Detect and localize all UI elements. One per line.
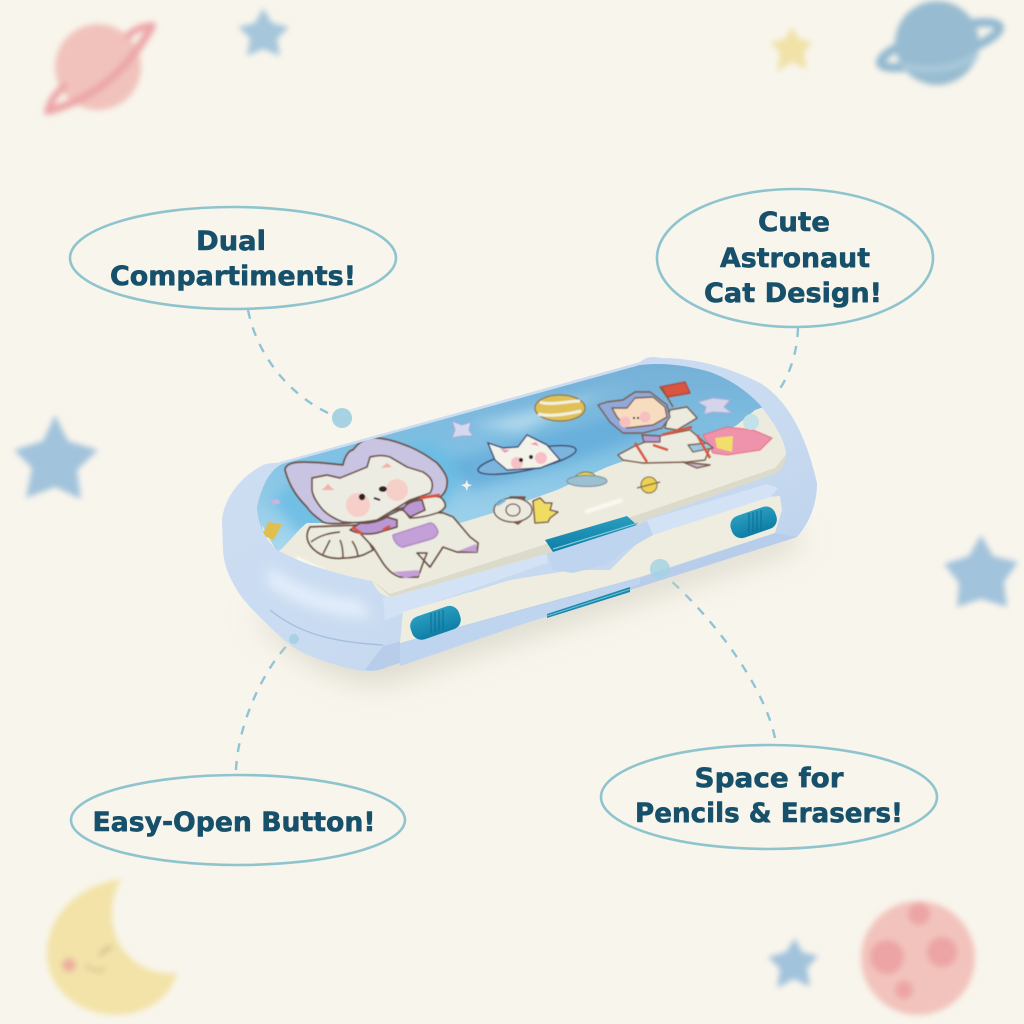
callout connector: dual compartments xyxy=(248,310,352,428)
front cream strip xyxy=(400,496,782,643)
callout: dual compartments: Dual xyxy=(196,226,266,257)
purple vest xyxy=(642,435,660,442)
astronaut bear xyxy=(598,382,713,468)
callout: dual compartments: Compartiments! xyxy=(110,261,356,292)
mini rocket xyxy=(494,497,558,524)
callout: cute astronaut cat design xyxy=(657,189,933,327)
teal bottom clasp xyxy=(547,587,630,618)
callout: space for pencils and erasers xyxy=(601,745,937,849)
pencil box product xyxy=(222,355,817,684)
yellow star sticker left xyxy=(263,522,282,540)
callout dot on slider xyxy=(650,559,670,579)
center notch xyxy=(547,522,653,573)
callout connector: easy-open button xyxy=(236,640,292,770)
small purple star sticker xyxy=(270,499,281,505)
yellow planet xyxy=(535,395,585,421)
callout dot on lid xyxy=(743,414,759,430)
callout connector: space for pencils xyxy=(668,578,775,738)
small yellow planet xyxy=(637,477,660,493)
left teal slider xyxy=(407,603,463,642)
icon: blue star left xyxy=(14,415,98,499)
small star xyxy=(461,480,472,491)
callout: dual compartments xyxy=(70,207,396,309)
blue arm xyxy=(688,443,713,452)
helmet xyxy=(598,392,670,433)
sleeve left xyxy=(350,517,397,534)
lower shell band xyxy=(400,578,640,666)
icon: red planet xyxy=(861,901,975,1015)
shadow xyxy=(250,525,800,684)
shell lower band xyxy=(365,533,797,671)
icon: blue ringed planet xyxy=(877,1,1003,85)
icon: crescent moon xyxy=(47,879,177,1015)
callout connector: astronaut cat design xyxy=(770,328,798,402)
callout: easy-open button: Easy-Open Button! xyxy=(92,807,376,838)
tail xyxy=(307,525,373,558)
head xyxy=(612,397,667,428)
astronaut cat left xyxy=(285,438,478,578)
left slider recess xyxy=(400,592,470,643)
callout: cute astronaut cat design: Cat Design! xyxy=(704,278,882,309)
star sticker right xyxy=(698,398,732,414)
foot xyxy=(683,462,710,468)
raised arm xyxy=(665,407,697,430)
lid artwork xyxy=(257,364,786,597)
cat face xyxy=(322,463,408,517)
shell seam xyxy=(270,610,383,645)
small cat planet xyxy=(476,435,578,480)
icon: blue star top xyxy=(238,8,289,56)
saucer xyxy=(567,472,607,486)
star sticker xyxy=(452,421,473,438)
callout: space for pencils and erasers: Pencils & Erasers! xyxy=(635,798,903,829)
foot and hand tips xyxy=(393,570,420,578)
box shell xyxy=(222,357,817,671)
pink rocket flame xyxy=(703,427,772,455)
red stripes xyxy=(635,427,710,462)
ground lower shading xyxy=(374,455,786,597)
helmet xyxy=(285,438,447,524)
pack xyxy=(393,523,438,547)
callout: space for pencils and erasers: Space for xyxy=(694,763,844,794)
head xyxy=(312,456,432,523)
ground xyxy=(262,404,800,605)
callout: cute astronaut cat design: Astronaut xyxy=(720,243,870,274)
callout: cute astronaut cat design: Cute xyxy=(758,207,830,238)
right teal slider xyxy=(728,504,780,541)
front rail right xyxy=(647,484,778,535)
icon: blue star right xyxy=(944,535,1018,607)
body xyxy=(357,510,478,577)
flag xyxy=(660,382,690,397)
icon: small blue star bottom xyxy=(768,938,818,988)
shell highlight xyxy=(268,566,372,618)
icon: pink ringed planet xyxy=(48,24,152,111)
red trim xyxy=(352,526,390,534)
sleeve right xyxy=(405,496,445,518)
rocket body xyxy=(618,430,710,463)
front rail left xyxy=(383,553,547,620)
icon: yellow star top xyxy=(770,27,813,72)
callout: easy-open button xyxy=(71,775,405,865)
sky xyxy=(250,355,795,555)
callout dot on corner xyxy=(289,634,299,644)
teal lid button xyxy=(545,516,637,552)
